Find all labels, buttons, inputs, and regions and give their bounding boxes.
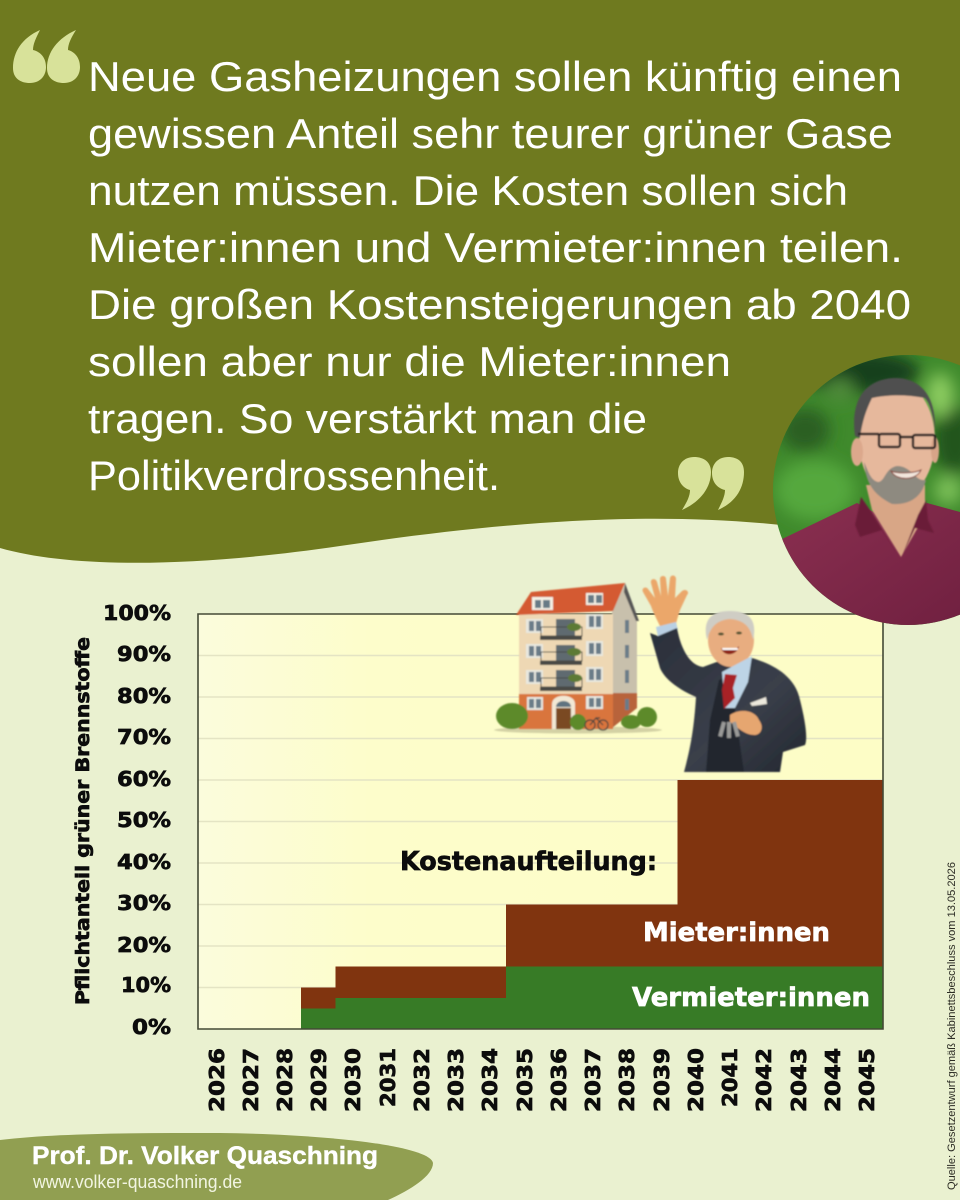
illustration: waving landlord with keys: [643, 575, 806, 772]
shirt: [780, 503, 960, 630]
bushes and bicycle: [496, 703, 657, 730]
y axis labels: 100%: [103, 601, 171, 625]
author name: Prof. Dr. Volker Quaschning: [32, 1142, 378, 1170]
x axis year labels: 2039: [650, 1048, 674, 1112]
source note: Quelle: Gesetzentwurf gemäß Kabinettsbeschluss vom 13.05.2026: [946, 862, 958, 1190]
shirt and tie: [722, 656, 752, 708]
plot background: [198, 614, 883, 1029]
quote text: Die großen Kostensteigerungen ab 2040: [88, 281, 911, 328]
beard: [864, 462, 926, 504]
quote text: sollen aber nur die Mieter:innen: [88, 338, 731, 385]
glasses: [858, 434, 935, 448]
roof: [516, 583, 625, 615]
label: tenants: Mieter:innen: [643, 918, 830, 948]
portrait photo: [770, 350, 960, 630]
footer name badge: [0, 1133, 433, 1200]
building side wall: [612, 584, 637, 728]
x axis year labels: 2040: [684, 1048, 708, 1112]
quote text: Mieter:innen und Vermieter:innen teilen.: [88, 224, 903, 271]
quote text: [88, 53, 911, 499]
y axis labels: 20%: [117, 933, 171, 957]
building front wall: [519, 614, 613, 694]
quote text: nutzen müssen. Die Kosten sollen sich: [88, 167, 848, 214]
x axis year labels: [205, 1048, 879, 1112]
x axis year labels: 2034: [478, 1048, 502, 1112]
tenant cost area: [301, 780, 883, 1029]
chart: mandatory share of green fuels: [72, 601, 883, 1112]
y axis labels: 60%: [117, 767, 171, 791]
photo background foliage: [770, 350, 960, 630]
x axis year labels: 2028: [273, 1048, 297, 1112]
jacket: [650, 628, 806, 772]
x axis year labels: 2042: [752, 1048, 776, 1112]
x axis year labels: 2044: [821, 1048, 845, 1112]
shirt cuff: [656, 622, 678, 637]
label: cost split heading: Kostenaufteilung:: [400, 847, 657, 877]
pocket square: [750, 697, 767, 706]
quote text: tragen. So verstärkt man die: [88, 395, 647, 442]
website: www.volker-quaschning.de: [32, 1172, 242, 1192]
vest: [706, 670, 745, 772]
header wave panel: [0, 0, 960, 563]
x axis year labels: 2045: [855, 1048, 879, 1112]
smile: [721, 646, 739, 654]
balconies: [540, 636, 582, 691]
y axis labels: 0%: [132, 1015, 171, 1039]
landlord cost area: [301, 966, 883, 1029]
y axis labels: 90%: [117, 642, 171, 666]
x axis year labels: 2033: [444, 1048, 468, 1112]
mouth: [891, 470, 921, 478]
x axis year labels: 2029: [307, 1048, 331, 1112]
y axis labels: 30%: [117, 891, 171, 915]
quote text: Politikverdrossenheit.: [88, 452, 500, 499]
head: [708, 613, 754, 667]
badge shape: [0, 1133, 433, 1200]
y axis labels: 50%: [117, 808, 171, 832]
hand with keys: [730, 711, 762, 735]
x axis year labels: 2043: [787, 1048, 811, 1112]
x axis year labels: 2041: [718, 1048, 742, 1107]
y axis labels: 80%: [117, 684, 171, 708]
collar: [855, 496, 882, 537]
x axis year labels: 2026: [205, 1048, 229, 1112]
y axis title: Pflichtanteil grüner Brennstoffe: [72, 637, 94, 1005]
x axis year labels: 2032: [410, 1048, 434, 1112]
label: landlords: Vermieter:innen: [632, 983, 870, 1013]
x axis year labels: 2038: [615, 1048, 639, 1112]
x axis year labels: 2030: [341, 1048, 365, 1112]
x axis year labels: 2037: [581, 1048, 605, 1112]
y axis labels: [103, 601, 171, 1039]
face: [858, 394, 936, 483]
y axis labels: 10%: [121, 973, 171, 997]
x axis year labels: 2027: [239, 1048, 263, 1112]
x axis year labels: 2036: [547, 1048, 571, 1112]
raised hand: [643, 575, 688, 628]
x axis year labels: 2035: [513, 1048, 537, 1112]
neck: [866, 485, 925, 557]
illustration: apartment building: [494, 583, 662, 734]
door: [552, 696, 575, 729]
y axis labels: 70%: [117, 725, 171, 749]
x axis year labels: 2031: [376, 1048, 400, 1107]
quote text: gewissen Anteil sehr teurer grüner Gase: [88, 110, 893, 157]
windows: [526, 614, 603, 710]
hair: [854, 378, 935, 438]
icon: closing quotation mark: [678, 457, 744, 510]
y axis labels: 40%: [117, 850, 171, 874]
icon: opening quotation mark: [13, 30, 80, 83]
quote text: Neue Gasheizungen sollen künftig einen: [88, 53, 902, 100]
